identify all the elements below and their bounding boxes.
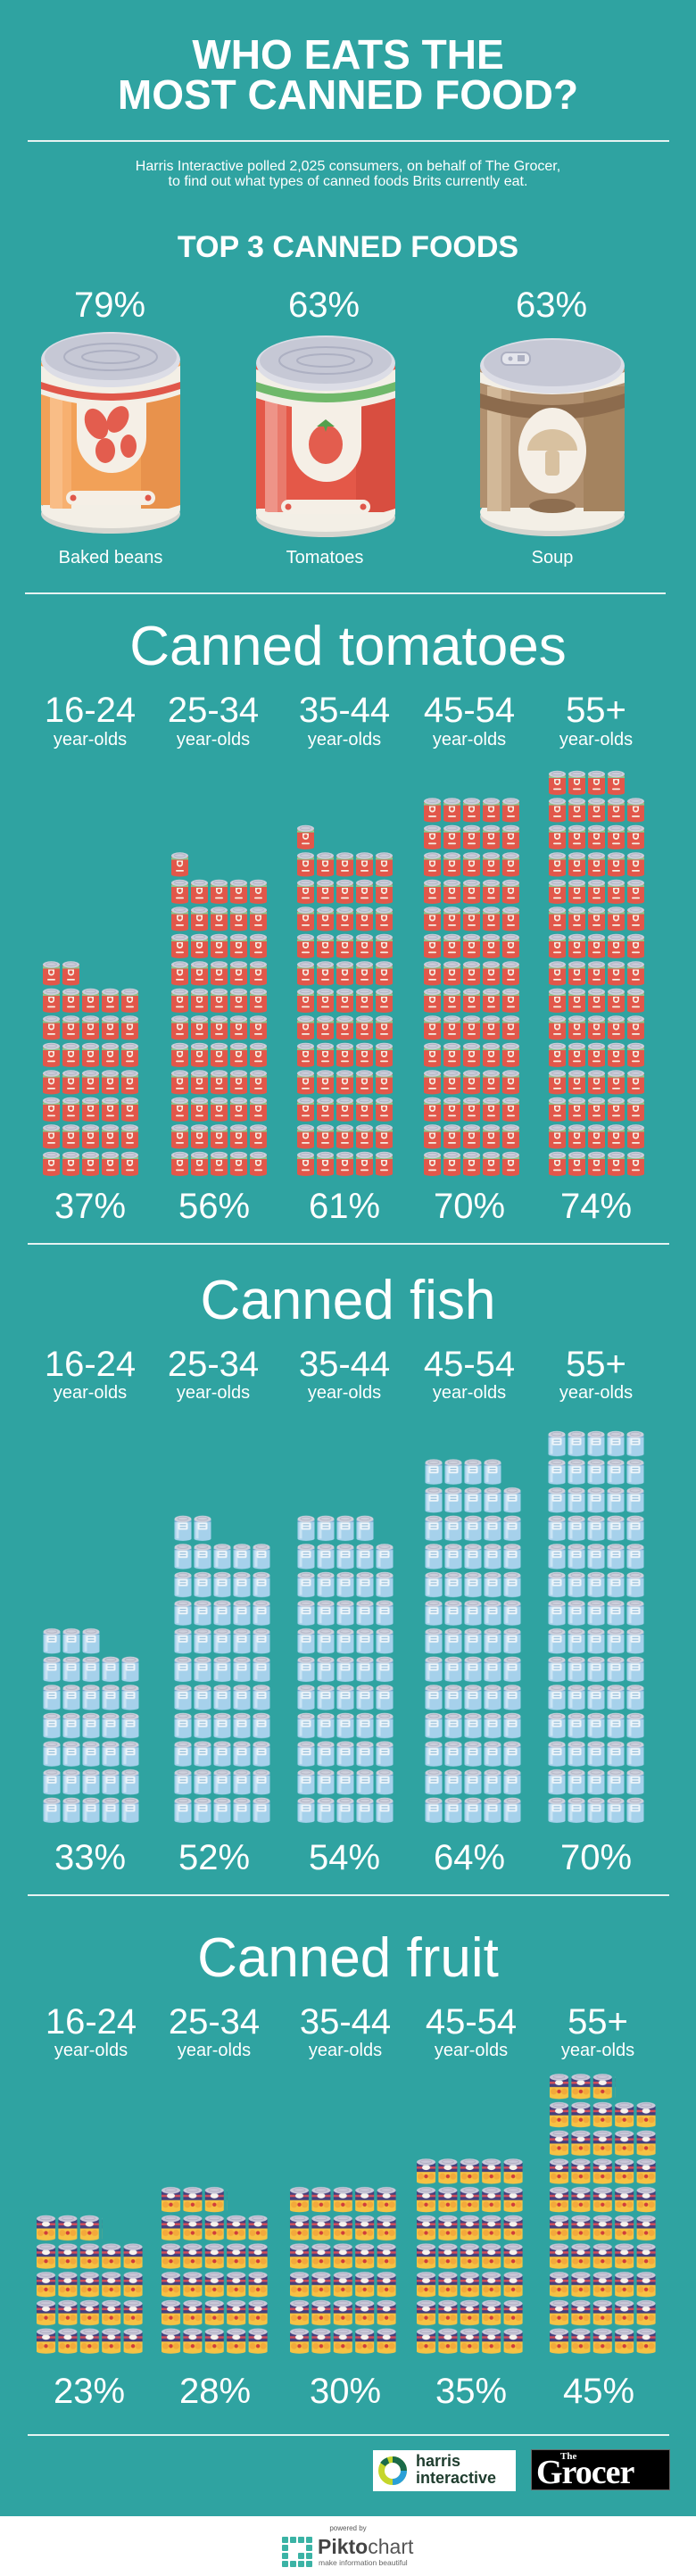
footer: piktochart: make information beautiful (319, 2558, 408, 2567)
intro text: Harris Interactive polled 2,025 consumers, on behalf of The Grocer, (136, 159, 560, 174)
logo: the grocer: The (560, 2451, 576, 2462)
logo: harris interactive: harris (416, 2452, 460, 2470)
icon: baked beans can (41, 332, 180, 534)
percentages: fish: 64% (434, 1838, 505, 1877)
percentages: fruit: 30% (310, 2372, 381, 2411)
percentages: fish: 54% (309, 1838, 380, 1877)
percentages: tomatoes (54, 1187, 632, 1226)
title (118, 31, 578, 118)
percentages: fish: 70% (560, 1838, 632, 1877)
label: tomatoes: Tomatoes (286, 548, 363, 567)
chart: tomato can pictogram (43, 771, 644, 1176)
percentages: fruit: 35% (435, 2372, 507, 2411)
icon: piktochart mark (282, 2537, 312, 2567)
age labels: 16-24 (45, 691, 136, 730)
icon: soup can (480, 338, 625, 536)
age labels: year-olds (433, 730, 506, 750)
percentages: tomatoes: 56% (178, 1187, 250, 1226)
age labels: year-olds (177, 730, 250, 750)
stat: baked beans 79%: 79% (74, 286, 145, 325)
age labels: year-olds (177, 1383, 250, 1403)
age labels: 45-54 (426, 2002, 517, 2042)
age labels: 35-44 (299, 691, 390, 730)
percentages: fruit: 28% (179, 2372, 251, 2411)
age labels: year-olds (308, 1383, 381, 1403)
logo: the grocer (531, 2449, 670, 2490)
panel: top 3 cans (41, 286, 625, 567)
percentages: fish: 52% (178, 1838, 250, 1877)
age labels: 35-44 (300, 2002, 391, 2042)
age labels (45, 1345, 633, 1403)
percentages: tomatoes: 74% (560, 1187, 632, 1226)
age labels: 16-24 (45, 1345, 136, 1384)
age labels: year-olds (54, 730, 127, 750)
age labels: year-olds (433, 1383, 506, 1403)
percentages: fruit (54, 2372, 634, 2411)
section: canned fruit (37, 1927, 656, 2411)
age labels: 25-34 (168, 1345, 259, 1384)
footer: piktochart: Piktochart (318, 2535, 413, 2558)
icon: tomatoes can (256, 335, 395, 537)
heading: canned fish: Canned fish (201, 1270, 495, 1331)
age labels: 25-34 (169, 2002, 260, 2042)
heading: canned fruit: Canned fruit (197, 1927, 499, 1989)
footer: piktochart (0, 2516, 696, 2576)
stat: tomatoes 63%: 63% (288, 286, 360, 325)
age labels: year-olds (559, 1383, 633, 1403)
intro text: to find out what types of canned foods Brits currently eat. (169, 174, 527, 189)
percentages: tomatoes: 70% (434, 1187, 505, 1226)
age labels: 45-54 (424, 691, 515, 730)
age labels (46, 2002, 634, 2060)
age labels: year-olds (308, 730, 381, 750)
age labels (45, 691, 633, 750)
age labels: year-olds (54, 2041, 128, 2060)
percentages: fruit: 45% (563, 2372, 634, 2411)
age labels: year-olds (54, 1383, 127, 1403)
label: soup: Soup (532, 548, 573, 567)
age labels: 55+ (568, 2002, 628, 2042)
percentages: tomatoes: 61% (309, 1187, 380, 1226)
percentages: fruit: 23% (54, 2372, 125, 2411)
footer: piktochart: powered by (329, 2524, 367, 2532)
logo: harris interactive (373, 2450, 516, 2491)
heading: canned tomatoes: Canned tomatoes (129, 616, 567, 677)
age labels: 55+ (566, 1345, 626, 1384)
age labels: year-olds (559, 730, 633, 750)
stat: soup 63%: 63% (516, 286, 587, 325)
chart: fish can pictogram (43, 1431, 644, 1823)
chart: fruit can pictogram (37, 2074, 656, 2354)
age labels: 25-34 (168, 691, 259, 730)
intro text (136, 159, 560, 189)
age labels: 16-24 (46, 2002, 137, 2042)
age labels: 35-44 (299, 1345, 390, 1384)
label: baked beans: Baked beans (59, 548, 162, 567)
logo: the grocer: Grocer (536, 2454, 634, 2491)
age labels: 45-54 (424, 1345, 515, 1384)
title: WHO EATS THE (192, 31, 504, 78)
age labels: year-olds (309, 2041, 382, 2060)
percentages: fish (54, 1838, 632, 1877)
logo: harris interactive: interactive (416, 2469, 496, 2487)
age labels: year-olds (561, 2041, 634, 2060)
section: canned tomatoes (43, 616, 644, 1226)
percentages: tomatoes: 37% (54, 1187, 126, 1226)
heading: top 3 canned foods: TOP 3 CANNED FOODS (178, 230, 518, 264)
title: MOST CANNED FOOD? (118, 71, 578, 118)
section: canned fish (43, 1270, 644, 1877)
age labels: 55+ (566, 691, 626, 730)
age labels: year-olds (435, 2041, 508, 2060)
age labels: year-olds (178, 2041, 251, 2060)
percentages: fish: 33% (54, 1838, 126, 1877)
